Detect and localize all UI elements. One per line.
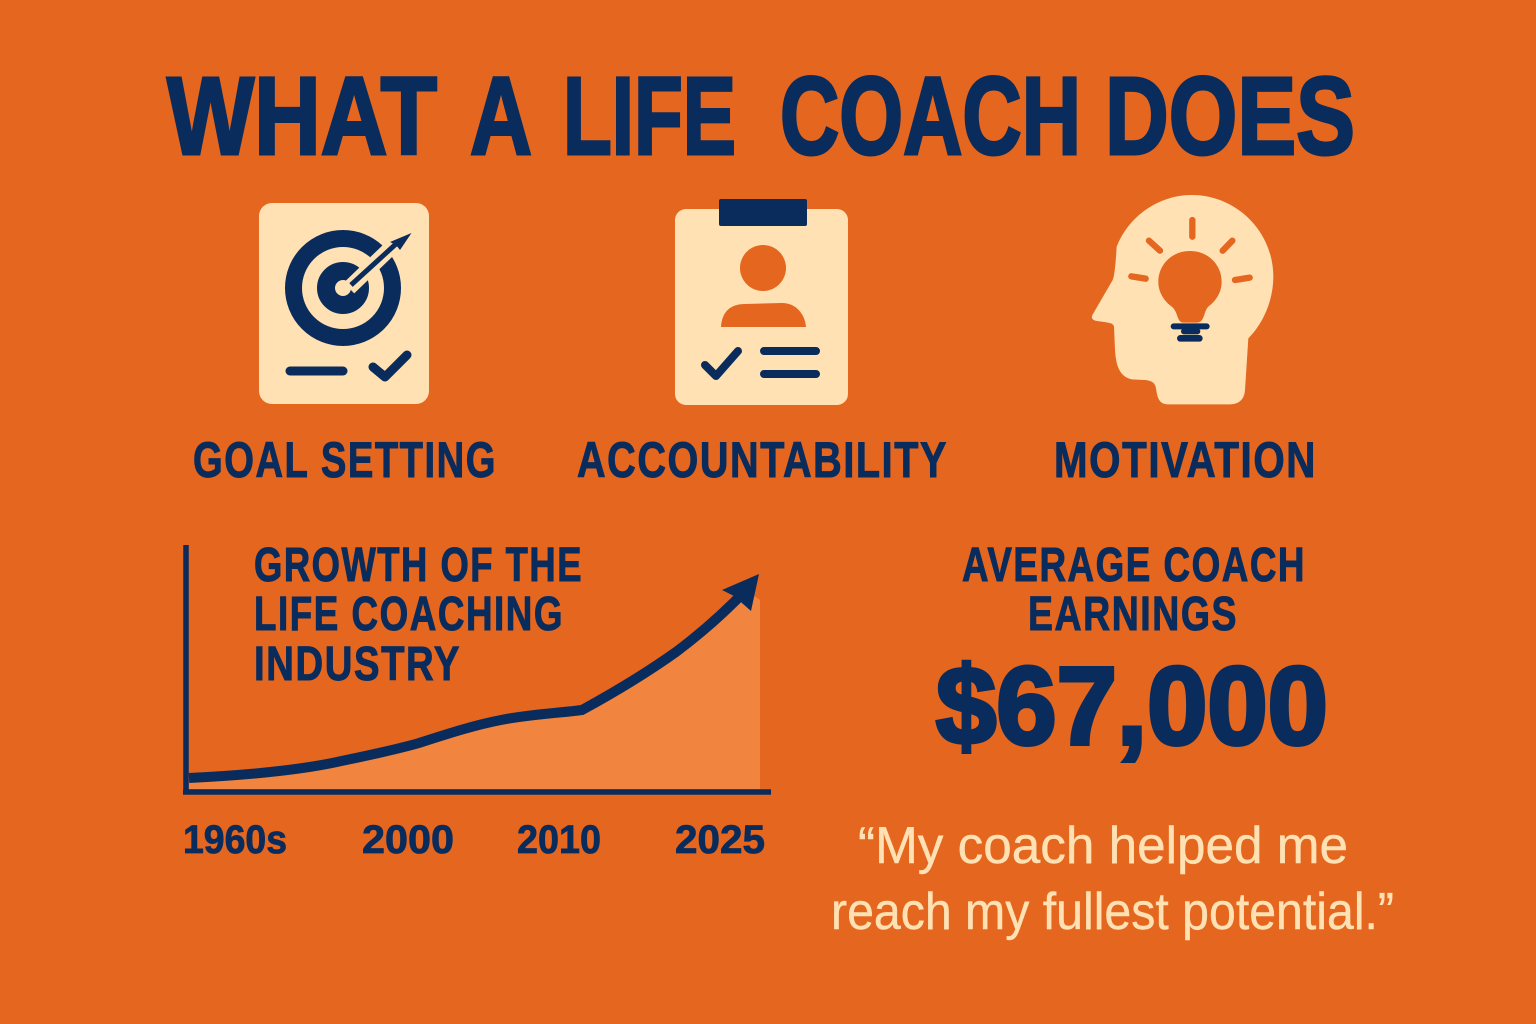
title: A bbox=[470, 55, 532, 178]
title: WHAT bbox=[167, 55, 437, 178]
label: accountability: ACCOUNTABILITY bbox=[577, 432, 948, 488]
title: COACH bbox=[780, 55, 1081, 178]
chart area fill bbox=[189, 590, 760, 789]
testimonial quote: reach my fullest potential.” bbox=[831, 883, 1394, 941]
label: motivation: MOTIVATION bbox=[1054, 432, 1317, 488]
panel: accountability bbox=[577, 199, 948, 488]
icon: target card bbox=[259, 203, 429, 404]
chart title: INDUSTRY bbox=[254, 638, 461, 691]
panel: industry growth chart bbox=[183, 539, 771, 862]
chart title: GROWTH OF THE bbox=[254, 539, 583, 592]
earnings figure: $67,000 bbox=[936, 645, 1328, 768]
title bbox=[167, 55, 1355, 178]
earnings heading: AVERAGE COACH bbox=[962, 539, 1306, 592]
x axis labels: 2025 bbox=[675, 818, 765, 862]
panel: motivation bbox=[1054, 195, 1317, 488]
icon: head with light bulb bbox=[1092, 195, 1273, 404]
earnings heading: EARNINGS bbox=[1028, 588, 1238, 641]
chart title: LIFE COACHING bbox=[254, 588, 564, 641]
chart title bbox=[254, 539, 583, 691]
title: LIFE bbox=[563, 55, 736, 178]
label: goal setting: GOAL SETTING bbox=[193, 432, 497, 488]
x axis labels: 1960s bbox=[183, 818, 287, 862]
axes bbox=[183, 545, 771, 792]
x axis labels: 2010 bbox=[517, 818, 601, 862]
x axis labels bbox=[183, 818, 765, 862]
earnings heading bbox=[962, 539, 1306, 641]
testimonial quote: “My coach helped me bbox=[858, 817, 1348, 875]
icon: clipboard with person bbox=[675, 199, 848, 405]
panel: average earnings bbox=[936, 539, 1328, 768]
panel: goal setting bbox=[193, 203, 497, 488]
growth line with arrow bbox=[189, 574, 759, 778]
x axis labels: 2000 bbox=[362, 818, 454, 862]
testimonial quote bbox=[831, 817, 1394, 941]
title: DOES bbox=[1105, 55, 1355, 178]
